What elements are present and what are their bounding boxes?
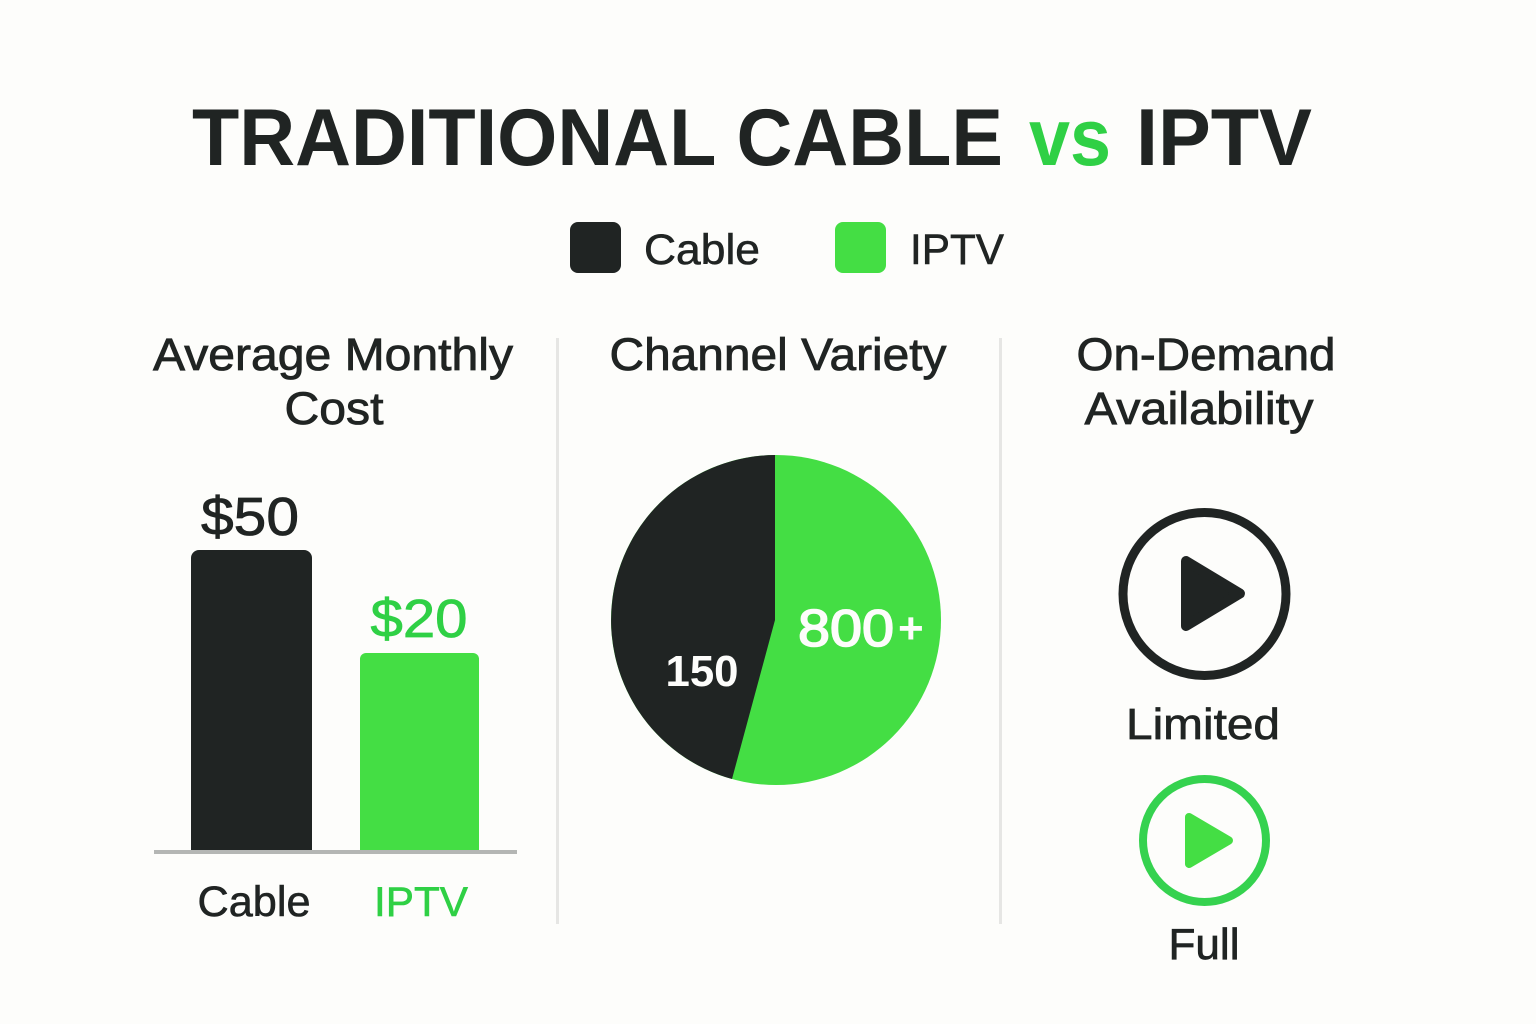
heading: on-demand availability: On-Demand bbox=[1076, 329, 1336, 380]
panel divider right bbox=[999, 338, 1002, 924]
heading: average monthly cost: Average Monthly bbox=[153, 329, 514, 380]
legend: Cable bbox=[644, 226, 760, 274]
pie chart: 150 bbox=[666, 647, 738, 696]
title: IPTV bbox=[1136, 93, 1312, 183]
panel: average monthly cost bbox=[153, 329, 517, 926]
pie chart: 800 bbox=[798, 600, 894, 658]
panel: channel variety bbox=[610, 329, 947, 785]
panel: on-demand availability bbox=[1076, 329, 1336, 969]
bar chart bbox=[154, 487, 517, 926]
legend bbox=[570, 222, 1004, 274]
label: limited: Limited bbox=[1126, 700, 1280, 749]
heading: on-demand availability: Availability bbox=[1084, 383, 1314, 434]
bar chart: Cable bbox=[198, 878, 310, 926]
legend: IPTV bbox=[910, 226, 1004, 274]
bar chart: $50 bbox=[201, 487, 299, 547]
heading: average monthly cost bbox=[153, 329, 514, 434]
bar chart: $20 bbox=[370, 589, 468, 649]
pie chart: + bbox=[898, 604, 924, 653]
label: full: Full bbox=[1168, 920, 1240, 969]
icon: full play bbox=[1143, 779, 1266, 902]
heading: average monthly cost: Cost bbox=[284, 383, 384, 434]
heading: on-demand availability bbox=[1076, 329, 1336, 434]
heading: channel variety: Channel Variety bbox=[610, 329, 947, 380]
title: vs bbox=[1029, 93, 1111, 183]
bar chart: IPTV bbox=[374, 878, 468, 925]
panel divider left bbox=[556, 338, 559, 924]
icon: limited play bbox=[1123, 512, 1286, 676]
pie chart bbox=[611, 455, 941, 785]
title: TRADITIONAL CABLE bbox=[192, 93, 1003, 183]
